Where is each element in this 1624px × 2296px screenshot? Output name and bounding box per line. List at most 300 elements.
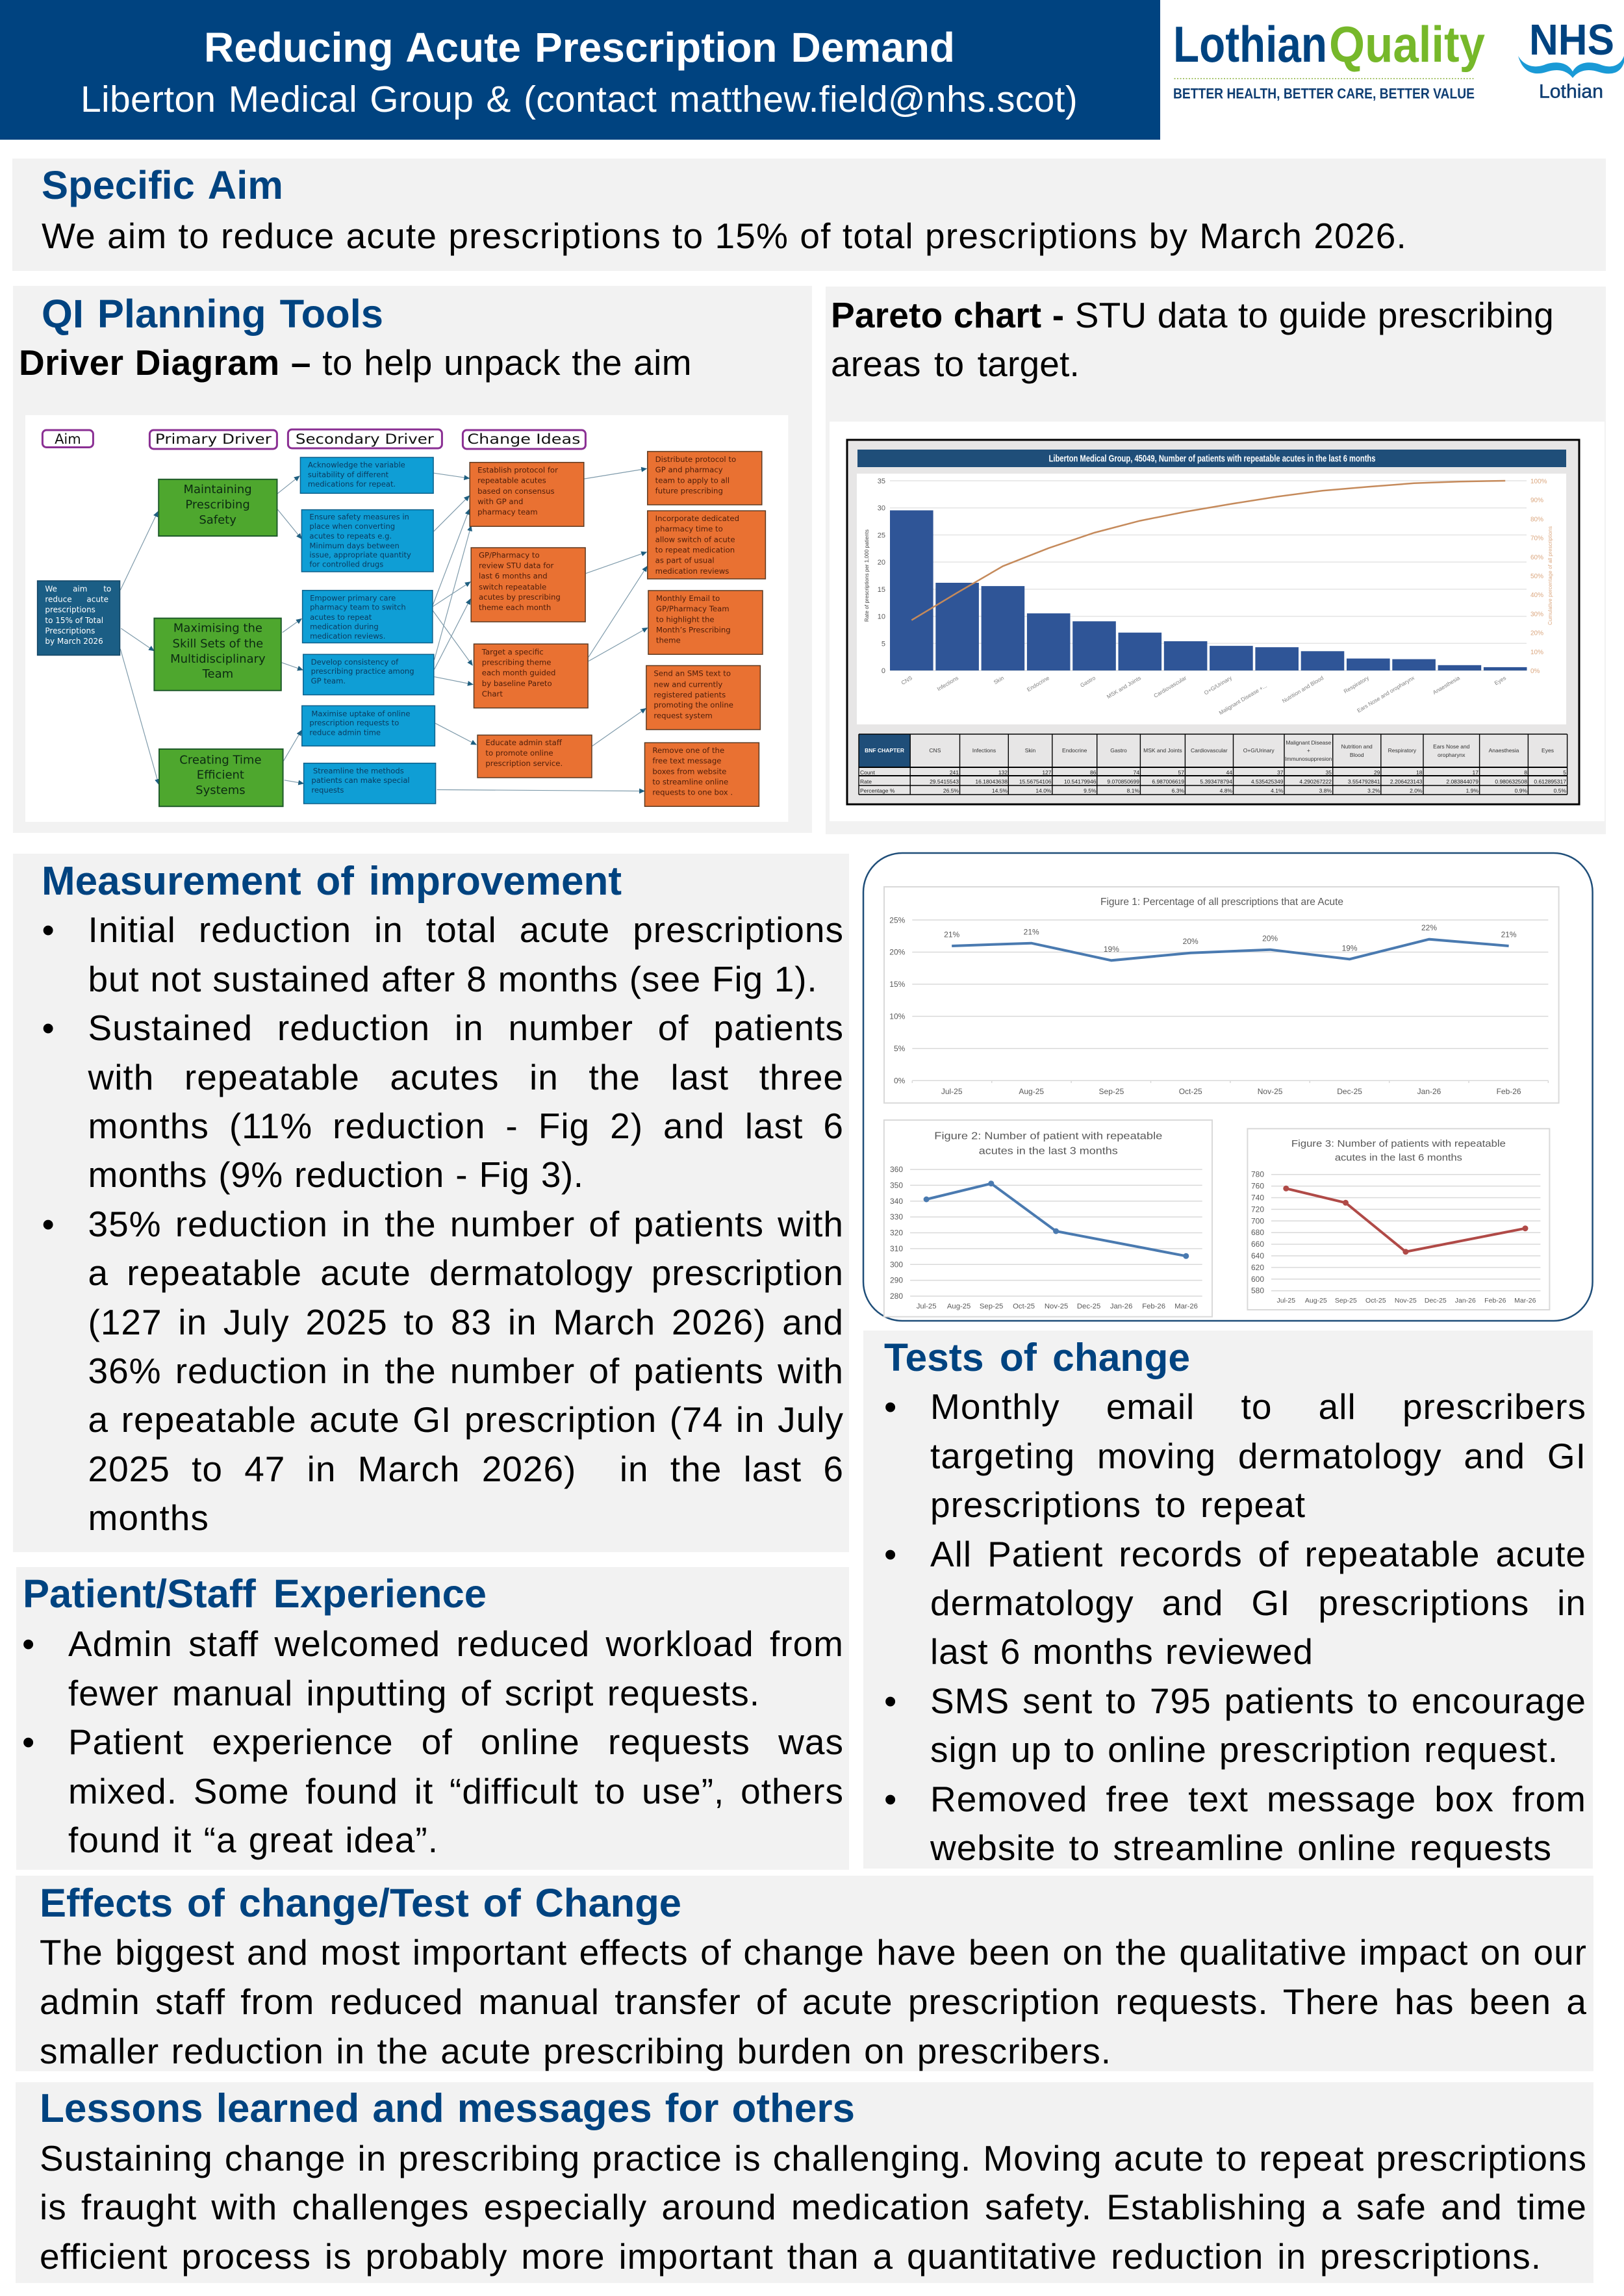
chart: figure 3: Aug-25 <box>1305 1297 1327 1305</box>
data table: 4.1% <box>1271 787 1284 794</box>
column headers: Secondary Driver <box>295 431 434 447</box>
change idea text: GP/Pharmacy to <box>479 551 539 560</box>
panel: specific aim <box>12 159 1606 271</box>
chart: figure 3: 760 <box>1251 1182 1264 1191</box>
primary driver text: Team <box>201 667 233 681</box>
data table: Count <box>860 769 875 776</box>
data table: 14.0% <box>1035 787 1052 794</box>
logo: Lothian Quality: Lothian <box>1173 16 1327 73</box>
aim box <box>37 581 120 655</box>
primary driver text: Systems <box>196 784 245 797</box>
text: tests of change bullets: prescriptions to repeat <box>930 1485 1306 1525</box>
change idea text: theme each month <box>479 603 551 612</box>
data table: Eyes <box>1542 747 1554 754</box>
chart: figure 2: 280 <box>890 1292 903 1301</box>
secondary driver text: pharmacy team to switch <box>310 603 405 612</box>
chart: figure 1: Figure 1: Percentage of all prescriptions that are Acute <box>1100 897 1343 908</box>
chart: figure 2: 330 <box>890 1212 903 1221</box>
chart: figure 3: 600 <box>1251 1275 1264 1284</box>
chart: figure 3: 580 <box>1251 1286 1264 1295</box>
data table: 86 <box>1090 769 1097 776</box>
data table: Malignant Disease <box>1286 739 1332 746</box>
change idea text: prescription service. <box>485 759 563 768</box>
secondary driver text: medications for repeat. <box>307 479 396 489</box>
text: experience bullets: found it “a great idea”. <box>68 1820 438 1860</box>
data table: 26.5% <box>943 787 959 794</box>
aim box: aim <box>73 584 87 593</box>
chart: figure 3: 780 <box>1251 1170 1264 1179</box>
heading: QI planning tools: QI Planning Tools <box>42 292 383 337</box>
change idea text: to promote online <box>485 748 553 758</box>
secondary driver text: Acknowledge the variable <box>307 461 405 470</box>
text: tests of change bullets: sign up to online prescription request. <box>930 1729 1558 1770</box>
logo: Lothian Quality: BETTER HEALTH, BETTER CARE, BETTER VALUE <box>1173 86 1475 102</box>
data table: 4.8% <box>1220 787 1232 794</box>
arrows <box>120 468 647 791</box>
aim box: to 15% of Total <box>45 616 103 625</box>
chart: figure 3: 720 <box>1251 1205 1264 1214</box>
chart: figure 3: 660 <box>1251 1240 1264 1249</box>
data table: 8 <box>1524 769 1527 776</box>
Pareto plot: 5 <box>882 640 885 648</box>
chart: figure 3: 620 <box>1251 1263 1264 1272</box>
text: measurement bullets: • <box>42 1204 55 1244</box>
text: measurement bullets: a repeatable acute GI prescription (74 in July <box>88 1399 844 1440</box>
change idea text: Monthly Email to <box>655 594 720 603</box>
change idea text: prescribing theme <box>481 658 551 667</box>
chart: figure 1: 20% <box>889 948 906 957</box>
primary driver text: Creating Time <box>179 754 261 767</box>
text: Pareto caption <box>831 295 1554 383</box>
data table: Infections <box>972 747 996 754</box>
change idea text: last 6 months and <box>479 572 547 581</box>
data table: Gastro <box>1110 747 1127 754</box>
chart: figure 2: 300 <box>890 1260 903 1269</box>
change idea text: to highlight the <box>655 615 714 624</box>
secondary driver text: Empower primary care <box>310 593 396 602</box>
change idea text: by baseline Pareto <box>481 679 552 688</box>
text: tests of change bullets: website to streamline online requests <box>930 1828 1552 1868</box>
Pareto plot: MSK and Joints <box>1106 674 1142 700</box>
chart: figure 2: 290 <box>890 1276 903 1285</box>
text: effects of change: The biggest and most important effects of change have been on the qualitative impact on our <box>40 1932 1587 1972</box>
chart: figure 2: 340 <box>890 1197 903 1206</box>
text: experience bullets: Admin staff welcomed reduced workload from <box>68 1624 844 1664</box>
Pareto plot: Rate of prescriptions per 1,000 patients <box>864 529 870 622</box>
change idea text: Educate admin staff <box>485 738 562 747</box>
chart: figure 2: 360 <box>890 1165 903 1174</box>
data table: 35 <box>1326 769 1332 776</box>
text: experience bullets: fewer manual inputting of script requests. <box>68 1673 760 1713</box>
text: lessons learned: is fraught with challenges especially around medication safety. Establishing a safe and time <box>40 2187 1587 2227</box>
panel: tests of change <box>863 1331 1593 1869</box>
text: measurement bullets <box>42 910 844 1538</box>
chart: figure 1: 0% <box>894 1076 906 1085</box>
text: measurement bullets: 2025 to 47 in March 2026) in the last 6 <box>88 1449 844 1489</box>
Pareto plot: Gastro <box>1079 674 1097 689</box>
secondary driver text: Ensure safety measures in <box>309 513 409 522</box>
data table: Nutrition and <box>1341 743 1373 750</box>
data table: 44 <box>1226 769 1232 776</box>
Pareto plot: 20% <box>1530 630 1543 637</box>
text: experience bullets <box>22 1624 844 1860</box>
change idea text: to streamline online <box>652 777 728 786</box>
primary driver text: Prescribing <box>185 498 249 512</box>
text: measurement bullets: • <box>42 910 55 950</box>
aim box: prescriptions <box>45 605 95 614</box>
panel: figures <box>863 852 1593 1321</box>
aim box: We <box>45 584 57 593</box>
Pareto plot: Anaesthesia <box>1432 674 1461 696</box>
chart: figure 1: 20% <box>1183 937 1199 946</box>
data table: 241 <box>950 769 959 776</box>
data table: 18 <box>1416 769 1423 776</box>
data table: 2.0% <box>1410 787 1423 794</box>
Pareto plot: 0% <box>1530 668 1540 675</box>
text: measurement bullets: with repeatable acutes in the last three <box>88 1057 844 1097</box>
data table: 10.54179946 <box>1064 778 1097 785</box>
secondary driver text: Streamline the methods <box>312 767 403 776</box>
secondary driver text: Develop consistency of <box>311 657 399 667</box>
header banner <box>0 0 1160 140</box>
data table: 6.987006619 <box>1152 778 1184 785</box>
text: tests of change bullets: • <box>884 1779 896 1819</box>
chart: figure 3: Oct-25 <box>1365 1297 1386 1305</box>
chart: figure 3: 700 <box>1251 1216 1264 1225</box>
change idea text: review STU data for <box>479 561 553 570</box>
secondary drivers <box>300 457 435 804</box>
Pareto plot: 25 <box>878 531 885 539</box>
primary driver text: Maximising the <box>173 622 262 635</box>
heading: patient and staff experience: Patient/Staff Experience <box>23 1572 487 1616</box>
Pareto plot: 35 <box>878 478 885 485</box>
chart: figure 1: Oct-25 <box>1179 1087 1202 1096</box>
data table: 57 <box>1178 769 1184 776</box>
change idea text: as part of usual <box>655 556 714 565</box>
data table: 0.5% <box>1554 787 1566 794</box>
text: effects of change: smaller reduction in the acute prescribing burden on prescribers. <box>40 2031 1111 2071</box>
text: experience bullets: mixed. Some found it “difficult to use”, others <box>68 1771 844 1811</box>
text: driver diagram caption: Driver Diagram – to help unpack the aim <box>19 342 692 383</box>
data table: MSK and Joints <box>1143 747 1182 754</box>
change idea text: pharmacy time to <box>655 524 722 533</box>
Pareto plot: 10 <box>878 613 885 621</box>
secondary driver text: issue, appropriate quantity <box>309 550 411 559</box>
text: tests of change bullets: Removed free text message box from <box>930 1779 1586 1819</box>
chart title band <box>857 450 1566 467</box>
text: measurement bullets: 36% reduction in the number of patients with <box>88 1351 844 1391</box>
Pareto plot: Ears Nose and oropharynx <box>1356 674 1416 714</box>
primary drivers <box>154 479 283 806</box>
chart: figure 2: Dec-25 <box>1077 1303 1100 1310</box>
chart: figure 3: Dec-25 <box>1425 1297 1447 1305</box>
chart: figure 3: 640 <box>1251 1251 1264 1260</box>
text: tests of change bullets: SMS sent to 795 patients to encourage <box>930 1681 1586 1721</box>
primary driver text <box>170 483 266 797</box>
text: tests of change bullets: targeting moving dermatology and GI <box>930 1436 1586 1476</box>
change idea text: team to apply to all <box>655 476 730 485</box>
data table: 4.535425349 <box>1251 778 1284 785</box>
text: tests of change bullets <box>884 1386 1586 1868</box>
chart: figure 2: Feb-26 <box>1142 1303 1165 1310</box>
Pareto plot: 30% <box>1530 611 1543 618</box>
change idea text: new and currently <box>653 680 722 689</box>
text: lessons learned: Sustaining change in prescribing practice is challenging. Moving acute to repeat prescriptions <box>40 2137 1587 2178</box>
data table: Rate <box>860 778 872 785</box>
primary driver text: Multidisciplinary <box>170 652 266 666</box>
data table: 37 <box>1277 769 1284 776</box>
chart: figure 1: 5% <box>894 1044 906 1053</box>
Pareto plot: Eyes <box>1493 674 1507 686</box>
chart: figure 3: Jan-26 <box>1455 1297 1476 1305</box>
Pareto plot: Malignant Disease +... <box>1218 682 1268 716</box>
panel: Pareto chart <box>826 287 1606 834</box>
chart: figure 3: acutes in the last 6 months <box>1335 1153 1462 1164</box>
secondary driver text: medication reviews. <box>310 631 385 641</box>
secondary driver text: prescription requests to <box>309 719 399 728</box>
text: experience bullets: Patient experience of online requests was <box>68 1722 844 1762</box>
chart: figure 3: 680 <box>1251 1228 1264 1237</box>
data table: 3.8% <box>1319 787 1332 794</box>
change idea text: Incorporate dedicated <box>655 514 739 523</box>
secondary driver text: acutes to repeat <box>310 613 372 622</box>
change idea text: medication reviews <box>655 567 729 576</box>
chart: figure 3: Nov-25 <box>1395 1297 1417 1305</box>
data table: 0.612895317 <box>1534 778 1566 785</box>
text: experience bullets: • <box>22 1722 34 1762</box>
Pareto plot: Cumulative percentage of all prescriptions <box>1547 526 1553 625</box>
data table: BNF CHAPTER <box>865 747 904 754</box>
change idea text: future prescribing <box>655 486 722 495</box>
text: lessons learned: efficient process is probably more important than a quantitative reduction in prescriptions. <box>40 2236 1542 2277</box>
primary driver text: Maintaining <box>183 483 251 496</box>
data table: 15.56754106 <box>1019 778 1052 785</box>
text: tests of change bullets: • <box>884 1681 896 1721</box>
change idea text: based on consensus <box>477 487 554 496</box>
text: measurement bullets: • <box>42 1008 55 1048</box>
data table: Percentage % <box>860 787 895 794</box>
text: measurement bullets: but not sustained after 8 months (see Fig 1). <box>88 959 817 999</box>
change idea text: acutes by prescribing <box>479 593 560 602</box>
chart: figure 2: Jul-25 <box>917 1303 936 1310</box>
logos <box>1173 16 1624 103</box>
change idea text: request system <box>653 711 712 721</box>
secondary driver text: acutes to repeats e.g. <box>309 531 392 541</box>
subtitle: Liberton Medical Group & (contact matthew.field@nhs.scot) <box>81 79 1078 120</box>
data table: Anaesthesia <box>1489 747 1519 754</box>
change idea text: GP/Pharmacy Team <box>655 604 729 613</box>
data table: 5.393478794 <box>1200 778 1232 785</box>
Pareto plot: 80% <box>1530 516 1543 523</box>
chart: figure 2: Nov-25 <box>1045 1303 1068 1310</box>
data table: 29.5415543 <box>930 778 959 785</box>
change idea text: registered patients <box>653 690 726 699</box>
change idea text: theme <box>655 635 680 644</box>
column headers <box>42 429 585 449</box>
Pareto plot <box>857 474 1566 724</box>
Pareto plot: Endocrine <box>1026 674 1050 693</box>
logo: Lothian Quality <box>1173 16 1485 102</box>
change idea text: Chart <box>481 689 503 698</box>
change idea text: free text message <box>652 756 721 765</box>
primary driver text: Safety <box>199 513 236 527</box>
chart: figure 1: 19% <box>1342 943 1358 952</box>
data table: O+G/Urinary <box>1243 747 1275 754</box>
chart: figure 1: 21% <box>1501 930 1517 939</box>
change idea text: pharmacy team <box>477 507 537 517</box>
data table: 4.290267222 <box>1299 778 1332 785</box>
title: Reducing Acute Prescription Demand <box>204 24 955 71</box>
change idea text: with GP and <box>477 497 523 506</box>
chart: figure 1: 20% <box>1262 934 1278 943</box>
change idea text: switch repeatable <box>479 583 546 592</box>
text: Pareto caption: Pareto chart - STU data to guide prescribing <box>831 295 1554 335</box>
change idea text: each month guided <box>481 669 555 678</box>
Pareto plot: Nutrition and Blood <box>1281 674 1325 704</box>
Pareto plot: 100% <box>1530 478 1547 485</box>
data table: 3.554792841 <box>1348 778 1380 785</box>
heading: tests of change: Tests of change <box>884 1335 1190 1379</box>
secondary driver text: prescribing practice among <box>311 667 414 676</box>
chart: figure 1: 15% <box>889 980 906 989</box>
chart: figure 3: Jul-25 <box>1276 1297 1295 1305</box>
text: tests of change bullets: All Patient records of repeatable acute <box>930 1534 1586 1574</box>
primary driver text: Efficient <box>196 769 244 782</box>
secondary driver text: reduce admin time <box>309 728 381 737</box>
change idea text: Establish protocol for <box>477 466 558 475</box>
aim box: acute <box>86 594 108 604</box>
chart: figure 1 <box>884 887 1559 1103</box>
chart: figure 2: Jan-26 <box>1110 1303 1132 1310</box>
chart: figure 2: Mar-26 <box>1174 1303 1198 1310</box>
data table: 6.3% <box>1172 787 1184 794</box>
data table: oropharynx <box>1438 752 1465 758</box>
chart: figure 3: 740 <box>1251 1193 1264 1202</box>
data table: 127 <box>1042 769 1052 776</box>
panel: lessons learned <box>16 2082 1593 2283</box>
change idea text: promoting the online <box>653 700 733 709</box>
data table: Blood <box>1350 752 1364 758</box>
data table <box>859 734 1567 795</box>
data table: 74 <box>1134 769 1139 776</box>
Pareto plot: O+G/Urinary <box>1203 674 1234 696</box>
change idea text: repeatable acutes <box>477 476 546 485</box>
chart: figure 2: Oct-25 <box>1013 1303 1035 1310</box>
data table: 9.5% <box>1084 787 1097 794</box>
logo: NHS Lothian: NHS <box>1529 16 1614 64</box>
heading: effects of change: Effects of change/Test of Change <box>40 1881 681 1926</box>
text: effects of change <box>40 1932 1587 2071</box>
Pareto plot: 40% <box>1530 592 1543 599</box>
Pareto plot: Skin <box>993 674 1005 685</box>
text: tests of change bullets: last 6 months reviewed <box>930 1631 1313 1672</box>
text: measurement bullets: months (11% reduction - Fig 2) and last 6 <box>88 1106 844 1146</box>
data table: Immunosuppresion <box>1285 756 1332 762</box>
text: tests of change bullets: • <box>884 1534 896 1574</box>
heading: measurement of improvement: Measurement of improvement <box>42 859 622 904</box>
driver diagram <box>25 415 789 822</box>
Pareto chart figure <box>830 422 1605 821</box>
column headers: Primary Driver <box>155 431 272 447</box>
chart: figure 1: Nov-25 <box>1258 1087 1283 1096</box>
aim box: to <box>103 584 111 593</box>
data table: 8.1% <box>1127 787 1139 794</box>
chart: figure 1: Aug-25 <box>1019 1087 1044 1096</box>
text: measurement bullets: 35% reduction in the number of patients with <box>88 1204 844 1244</box>
secondary driver text: Maximise uptake of online <box>311 709 410 718</box>
Pareto plot: Cardiovascular <box>1152 674 1187 699</box>
heading: lessons learned: Lessons learned and messages for others <box>40 2086 855 2131</box>
text: measurement bullets: Sustained reduction in number of patients <box>88 1008 844 1048</box>
panel: patient and staff experience <box>16 1567 849 1870</box>
data table: 5 <box>1563 769 1566 776</box>
data table: 2.083844079 <box>1446 778 1478 785</box>
text: Pareto caption: areas to target. <box>831 343 1080 383</box>
data table: 0.980632508 <box>1495 778 1527 785</box>
Pareto plot: CNS <box>900 674 913 686</box>
logo: Lothian Quality: Quality <box>1329 16 1485 73</box>
Pareto plot: Respiratory <box>1343 674 1371 695</box>
secondary driver text: medication during <box>310 622 378 631</box>
change idea text: Month’s Prescribing <box>655 625 730 634</box>
secondary driver text: suitability of different <box>307 470 388 479</box>
secondary driver text: patients can make special <box>311 776 409 785</box>
aim box: by March 2026 <box>45 637 103 646</box>
text: measurement bullets: months <box>88 1498 209 1538</box>
secondary driver text: GP team. <box>311 676 346 685</box>
chart: figure 1: Sep-25 <box>1099 1087 1124 1096</box>
data table: 2.206423143 <box>1390 778 1423 785</box>
text: lessons learned <box>40 2137 1587 2277</box>
data table: 29 <box>1374 769 1380 776</box>
Pareto plot: 50% <box>1530 573 1543 580</box>
text: measurement bullets: Initial reduction in total acute prescriptions <box>88 910 844 950</box>
data table: 16.18043638 <box>975 778 1008 785</box>
secondary driver text: requests <box>311 785 344 795</box>
chart: figure 1: Jul-25 <box>941 1087 963 1096</box>
chart: figure 1: 21% <box>944 930 960 939</box>
Pareto plot: Infections <box>936 674 959 692</box>
chart: figure 2 <box>884 1120 1212 1317</box>
chart title band: Liberton Medical Group, 45049, Number of patients with repeatable acutes in the last 6 months <box>1048 453 1376 464</box>
change idea text: Target a specific <box>481 648 543 657</box>
Pareto plot: 0 <box>882 667 885 675</box>
change ideas <box>470 452 765 806</box>
change idea text: boxes from website <box>652 767 726 776</box>
heading: specific aim: Specific Aim <box>42 163 283 208</box>
chart: figure 2: acutes in the last 3 months <box>979 1146 1118 1157</box>
chart: figure 1: Jan-26 <box>1417 1087 1441 1096</box>
text: measurement bullets: months (9% reduction - Fig 3). <box>88 1154 583 1195</box>
logo: NHS Lothian: Lothian <box>1539 81 1603 103</box>
chart: figure 2: Aug-25 <box>947 1303 971 1310</box>
text: measurement bullets: (127 in July 2025 to 83 in March 2026) and <box>88 1302 844 1342</box>
change idea text: allow switch of acute <box>655 535 735 544</box>
data table: 3.2% <box>1367 787 1380 794</box>
chart: figure 2: Figure 2: Number of patient with repeatable <box>934 1130 1162 1142</box>
data table: Ears Nose and <box>1433 743 1470 750</box>
Pareto plot: 30 <box>878 505 885 513</box>
chart: figure 3: Mar-26 <box>1514 1297 1536 1305</box>
data table: Respiratory <box>1388 747 1417 754</box>
chart: figure 1: 22% <box>1421 923 1437 932</box>
column headers: Aim <box>55 431 81 447</box>
change idea text: Send an SMS text to <box>653 669 731 678</box>
change idea text: Remove one of the <box>652 746 724 755</box>
chart: figure 1: Dec-25 <box>1337 1087 1362 1096</box>
secondary driver text <box>307 461 414 795</box>
chart: figure 1: 25% <box>889 915 906 925</box>
